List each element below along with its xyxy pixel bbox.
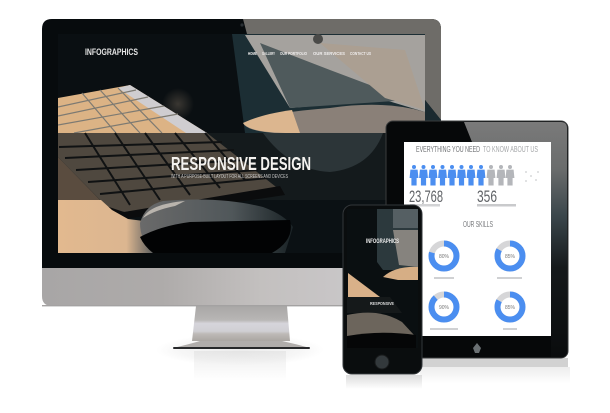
tablet glare	[464, 122, 567, 357]
site navigation: CONTACT US	[350, 51, 371, 56]
site navigation	[248, 52, 371, 55]
bezel glare	[243, 19, 441, 120]
responsive design device mockup	[42, 19, 570, 386]
stat: 23,768	[409, 187, 443, 206]
donut: skill one	[432, 244, 456, 279]
site navigation: GALLERY	[262, 51, 275, 56]
photo: mouse	[140, 199, 293, 253]
site logo text: INFOGRAPHICS	[85, 47, 138, 57]
hero subtitle: WITH A PURPOSE-BUILT LAYOUT FOR ALL SCREENS AND DEVICES	[171, 174, 288, 180]
donut: skill four: 85%	[505, 305, 516, 311]
donut: skill three: 90%	[439, 305, 450, 311]
skills heading: OUR SKILLS	[463, 220, 493, 229]
donut: skill two	[497, 244, 522, 279]
tablet shadow	[420, 358, 568, 367]
donut: skill one: 80%	[439, 254, 450, 260]
photo: lamp base	[243, 105, 425, 134]
stand shadow and reflection	[156, 334, 324, 380]
stat: 23,768: 23,768	[409, 187, 443, 206]
photo: dark translucent band	[208, 133, 386, 200]
phone screen	[347, 209, 418, 348]
phone logo text: INFOGRAPHICS	[366, 238, 399, 245]
tablet heading: TO KNOW ABOUT US	[483, 145, 538, 154]
site navigation: OUR PORTFOLIO	[280, 51, 307, 56]
phone photo: mouse	[347, 313, 414, 338]
photo: desk	[58, 200, 153, 253]
monitor bezel	[42, 19, 441, 268]
phone photo: keyboard	[348, 273, 380, 297]
photo: keyboard light part	[58, 85, 207, 133]
photo: wall shadow	[232, 34, 425, 134]
phone	[343, 205, 422, 389]
tablet screen	[404, 142, 551, 336]
donut: skill two: 85%	[505, 254, 516, 260]
phone home button	[375, 355, 389, 369]
people pictogram	[410, 165, 539, 186]
stat: 356: 356	[477, 187, 497, 206]
tablet home button	[473, 343, 481, 353]
phone body	[343, 205, 422, 374]
tablet	[386, 121, 570, 383]
site navigation: HOME	[248, 51, 257, 56]
site navigation: OUR SERVICES	[313, 51, 345, 56]
monitor	[42, 19, 441, 380]
donut: skill four	[498, 294, 522, 330]
photo: keyboard dark part	[58, 133, 280, 212]
photo: lamp light beam	[245, 35, 425, 112]
phone photo: lamp	[383, 267, 418, 280]
monitor stand	[173, 306, 310, 349]
phone photo: wall	[377, 209, 418, 270]
camera dot	[240, 23, 244, 27]
donut: skill three	[430, 294, 458, 330]
monitor chin	[42, 268, 441, 306]
phone reflection	[346, 375, 422, 389]
monitor screen photo	[58, 34, 425, 253]
phone heading: RESPONSIVE	[370, 301, 394, 306]
tablet body	[386, 121, 568, 358]
tablet heading: EVERYTHING YOU NEED	[416, 145, 480, 154]
hero heading: RESPONSIVE DESIGN	[171, 154, 311, 174]
